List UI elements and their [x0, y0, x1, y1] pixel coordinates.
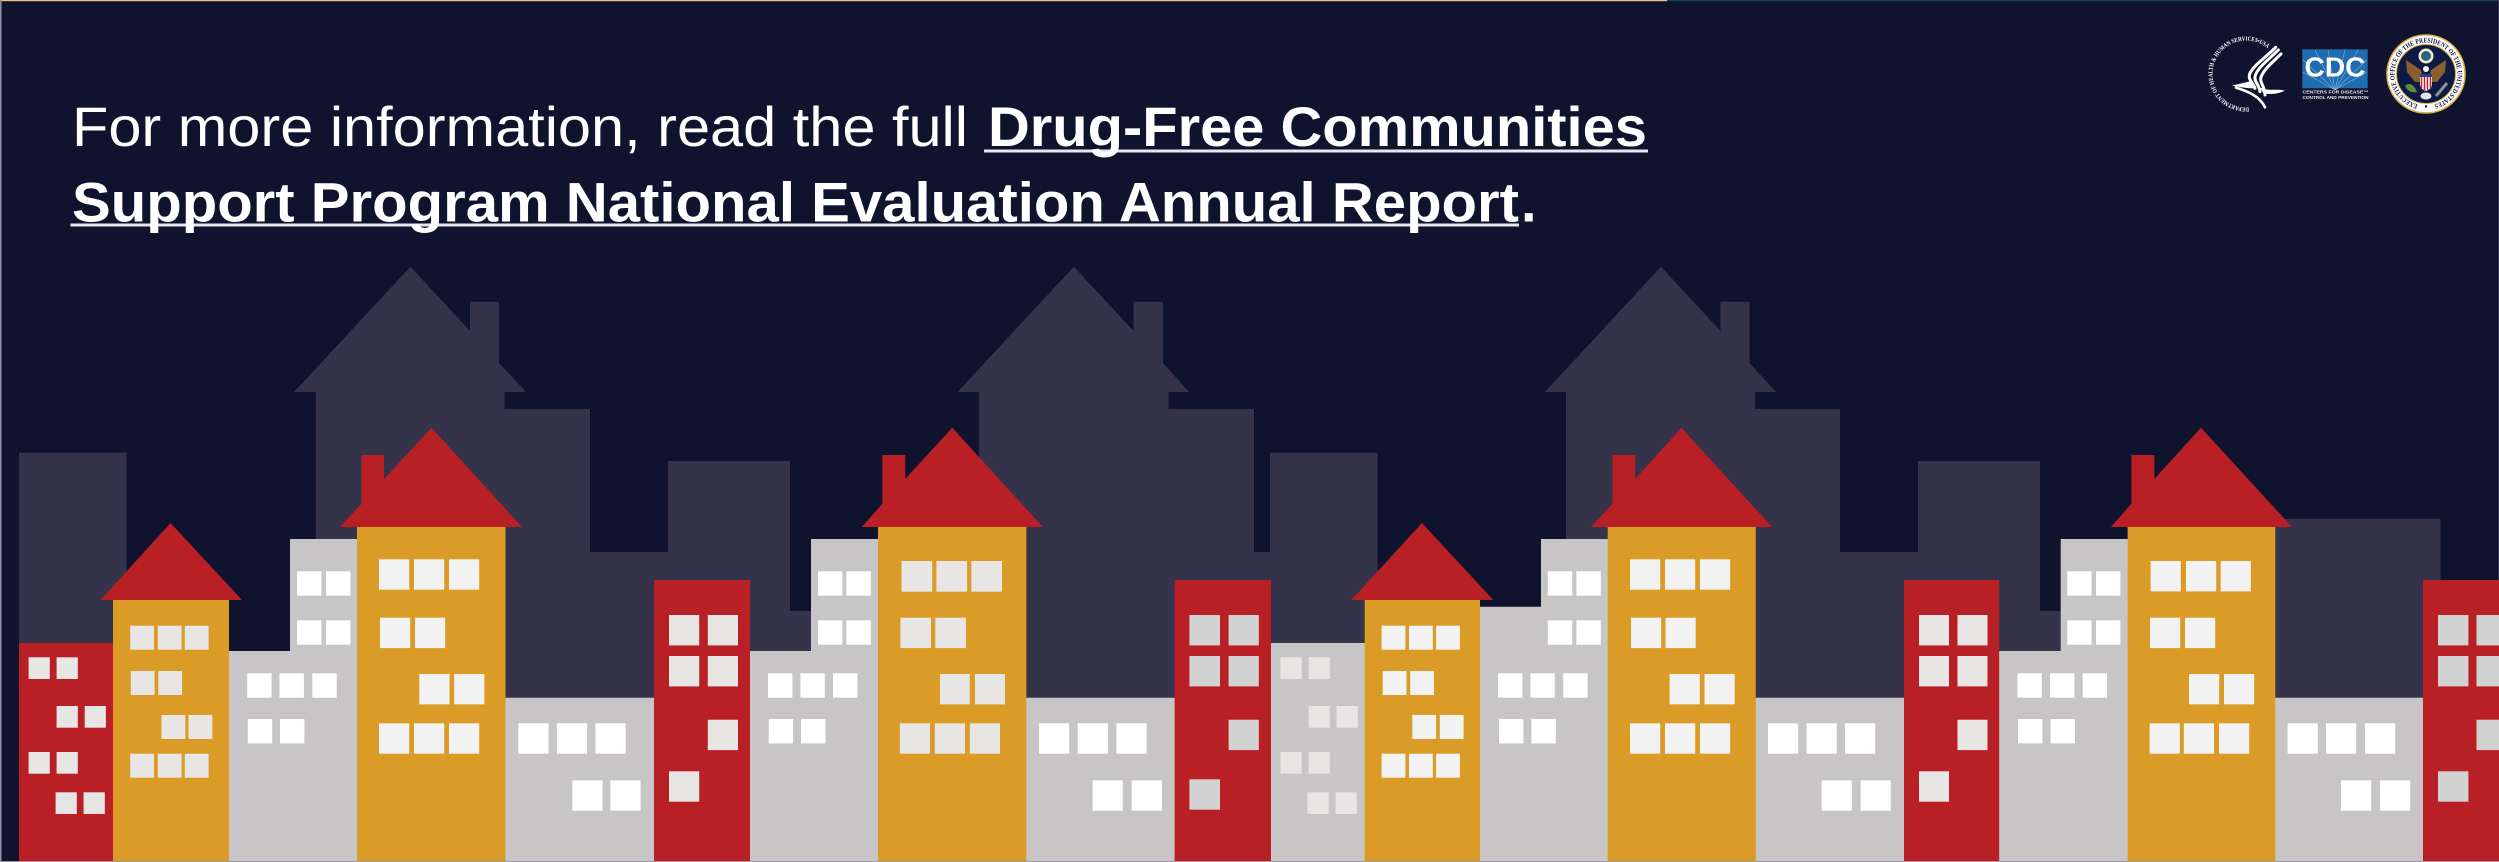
windows: white on gray — [247, 571, 2410, 811]
shadow building: castle three — [1545, 267, 2061, 862]
logo: CDC — [2302, 49, 2368, 100]
logo: CDC: CONTROL AND PREVENTION — [2302, 95, 2368, 100]
shadow building: left block — [19, 453, 126, 653]
gray buildings — [229, 539, 2423, 862]
windows: light on yellow — [379, 559, 2254, 778]
red buildings and roofs — [19, 428, 2499, 862]
shadow building: right block — [2275, 519, 2440, 862]
heading: Drug-Free Communities — [988, 95, 1647, 158]
shadow building: castle one — [294, 267, 811, 862]
windows: warm gray — [29, 561, 1988, 814]
shadow building: castle two — [958, 267, 1378, 862]
heading: For more information, read the full — [72, 95, 968, 158]
heading: Support Program National Evaluation Annual Report — [72, 170, 1519, 234]
heading: . — [1521, 170, 1537, 234]
logo: CDC: CENTERS FOR DISEASE™ — [2302, 90, 2368, 94]
windows: cool gray on red — [1189, 615, 2499, 810]
logo: CDC: CDC — [2304, 52, 2366, 82]
shadow skyline — [19, 267, 2440, 862]
foreground buildings — [19, 428, 2499, 862]
logo: Executive Office seal: EXECUTIVE OFFICE OF THE PRESIDENT OF THE UNITED STATES — [2390, 38, 2462, 109]
logo: HHS: DEPARTMENT OF HEALTH & HUMAN SERVICES•USA — [2208, 36, 2269, 112]
heading — [70, 95, 1648, 234]
yellow buildings — [113, 527, 2275, 862]
